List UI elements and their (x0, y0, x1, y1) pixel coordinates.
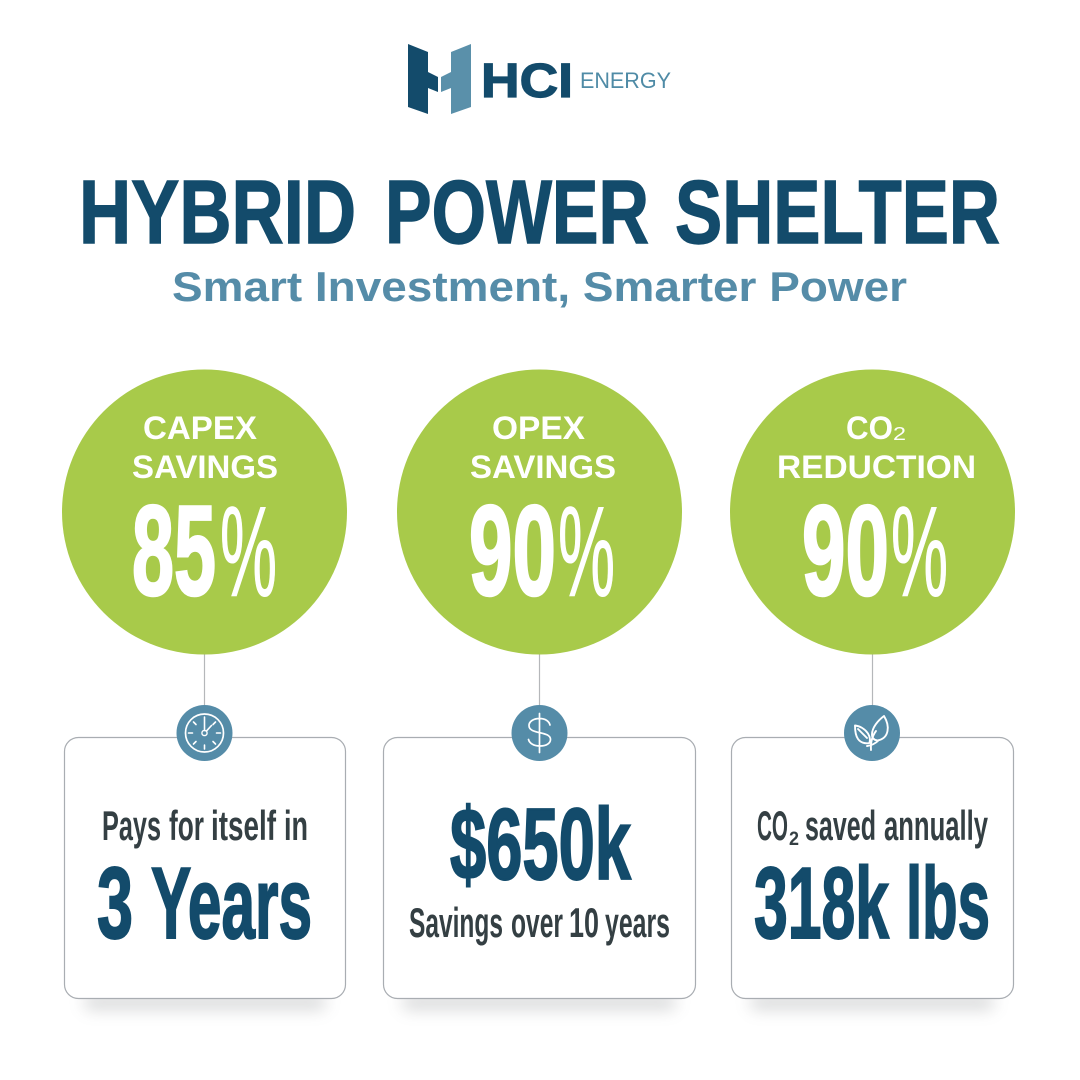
panel: CAPEX savings circle: CAPEX (143, 410, 258, 446)
panel: CO2 reduction circle: 2 (893, 424, 906, 444)
panel: OPEX savings circle: OPEX (492, 410, 586, 446)
text: CO2 saved annually (757, 802, 988, 850)
icon: dollar sign (512, 705, 568, 761)
panel: CAPEX savings circle: % (220, 481, 277, 624)
panel: CO2 reduction circle: % (891, 481, 948, 624)
panel: OPEX savings circle: SAVINGS (470, 449, 616, 485)
panel: CAPEX savings circle: SAVINGS (132, 449, 278, 485)
panel: CO2 reduction circle: CO (846, 410, 893, 446)
text: savings over 10 years (409, 899, 670, 946)
title: HYBRID (79, 163, 356, 263)
text: CO2 saved annually: saved (805, 802, 876, 849)
text: CO2 saved annually: 2 (789, 829, 799, 850)
icon: leaves (844, 705, 900, 761)
logo: HCI Energy: ENERGY (580, 68, 671, 93)
text: savings over 10 years: Savings (409, 899, 503, 946)
text: pays for itself in: in (284, 802, 308, 849)
logo: HCI Energy (408, 44, 671, 114)
text: 318k lbs: lbs (906, 848, 990, 960)
panel: OPEX savings circle: % (558, 481, 615, 624)
text: 3 years: Years (151, 848, 312, 960)
panel: OPEX savings circle: 90 (469, 480, 556, 623)
text: CO2 saved annually: CO (757, 802, 788, 849)
panel: savings card (384, 738, 696, 1010)
title: POWER (385, 163, 649, 263)
panel: CO2 saved card (732, 738, 1014, 1010)
panel: payback card (64, 738, 346, 1010)
connector lines (204, 650, 872, 710)
panel: CAPEX savings circle: 85 (132, 480, 216, 623)
text: pays for itself in: itself (211, 802, 277, 849)
text: CO2 saved annually: annually (884, 802, 988, 849)
text: 3 years (97, 848, 312, 960)
title (79, 163, 1000, 263)
subtitle: Smart Investment, Smarter Power (172, 263, 907, 310)
text: pays for itself in (102, 802, 308, 849)
logo: HCI Energy: HCI (481, 55, 573, 108)
title: SHELTER (675, 163, 1000, 263)
icon: clock (176, 705, 232, 761)
text: savings over 10 years: 10 (569, 899, 599, 946)
text: $650k: $650k (450, 789, 632, 901)
panel: CO2 reduction circle: 90 (802, 480, 889, 623)
text: savings over 10 years: years (605, 899, 670, 946)
text: savings over 10 years: over (511, 899, 563, 946)
panel: CO2 reduction circle: REDUCTION (777, 449, 976, 485)
text: 3 years: 3 (97, 848, 133, 960)
text: pays for itself in: for (169, 802, 204, 849)
panel: CO2 reduction circle (730, 370, 1015, 654)
text: pays for itself in: Pays (102, 802, 161, 849)
panel: CAPEX savings circle (62, 370, 347, 654)
text: 318k lbs: 318k (754, 848, 889, 960)
panel: OPEX savings circle (397, 370, 682, 654)
